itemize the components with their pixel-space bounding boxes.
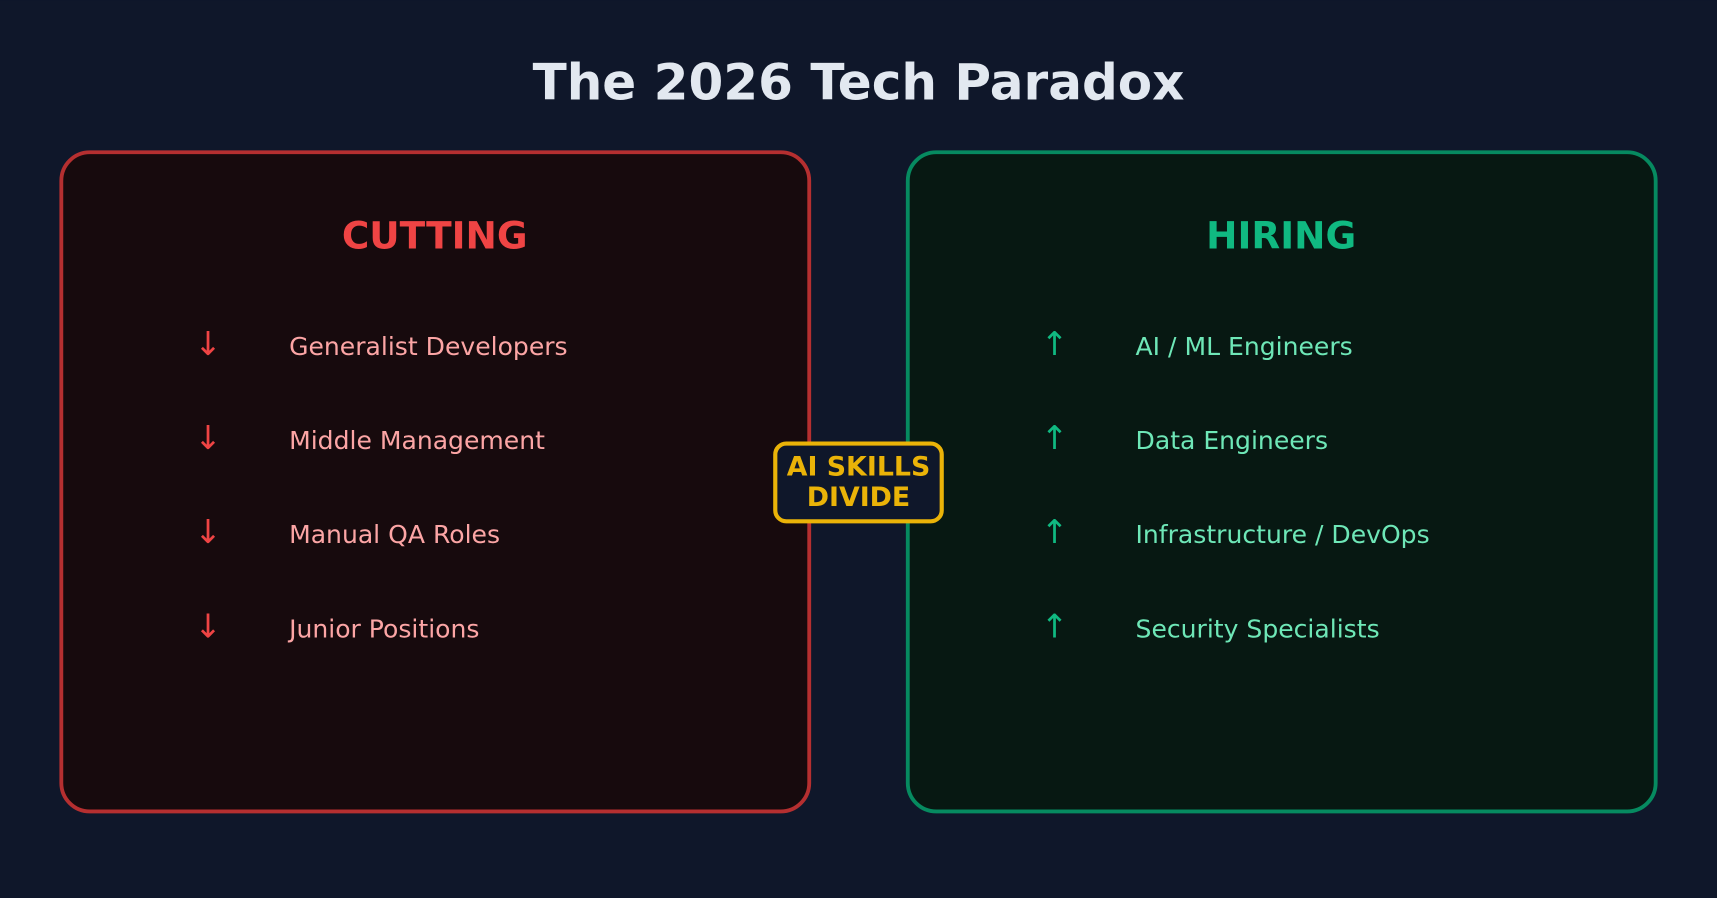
list: hiring roles: Security Specialists bbox=[1136, 614, 1380, 643]
list: cutting roles: ↓ bbox=[194, 607, 222, 645]
list: hiring roles: ↑ bbox=[1041, 513, 1068, 551]
panel: hiring bbox=[908, 152, 1656, 811]
list: cutting roles: ↓ bbox=[194, 513, 222, 551]
list: hiring roles: Infrastructure / DevOps bbox=[1136, 520, 1430, 549]
panel: cutting bbox=[61, 152, 809, 811]
list: cutting roles: Generalist Developers bbox=[289, 332, 568, 361]
heading: cutting: CUTTING bbox=[342, 214, 528, 258]
list: cutting roles bbox=[194, 325, 568, 645]
list: hiring roles: ↑ bbox=[1041, 607, 1068, 645]
callout: AI skills divide: AI SKILLS bbox=[787, 451, 930, 482]
list: hiring roles: AI / ML Engineers bbox=[1136, 332, 1353, 361]
list: hiring roles: ↑ bbox=[1041, 419, 1068, 457]
callout: AI skills divide bbox=[775, 444, 942, 521]
list: cutting roles: Manual QA Roles bbox=[289, 520, 500, 549]
list: hiring roles bbox=[1041, 325, 1430, 645]
list: hiring roles: ↑ bbox=[1041, 325, 1068, 363]
list: hiring roles: Data Engineers bbox=[1136, 426, 1328, 455]
list: cutting roles: ↓ bbox=[194, 419, 222, 457]
callout: AI skills divide: DIVIDE bbox=[807, 482, 910, 513]
title: The 2026 Tech Paradox bbox=[533, 54, 1184, 112]
list: cutting roles: Junior Positions bbox=[287, 614, 479, 643]
list: cutting roles: Middle Management bbox=[289, 426, 545, 455]
list: cutting roles: ↓ bbox=[194, 325, 222, 363]
heading: hiring: HIRING bbox=[1206, 214, 1356, 258]
